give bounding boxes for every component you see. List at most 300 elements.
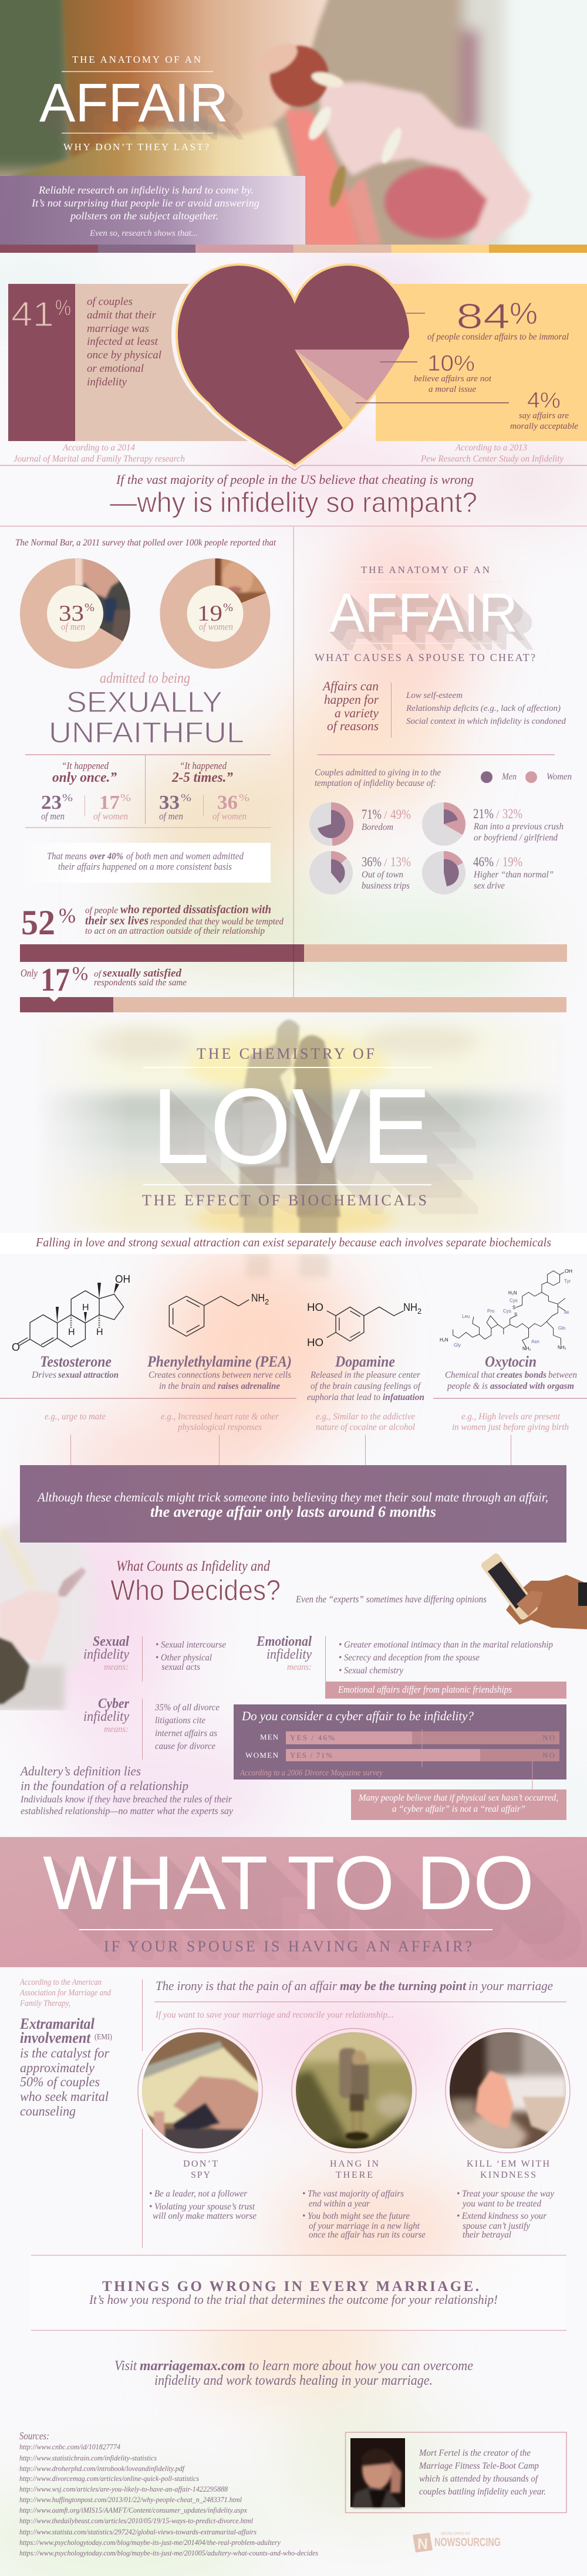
testosterone text: Testosterone xyxy=(40,1353,112,1370)
pie: previous crush: Ran into a previous crush xyxy=(473,822,564,832)
emotional infidelity definition: • Sexual chemistry xyxy=(339,1666,404,1676)
text block: adultery definition: established relationship—no matter what the experts say xyxy=(21,1805,234,1816)
sources list: http://www.statisticbrain.com/infidelity-statistics xyxy=(19,2453,157,2462)
molecule: phenylethylamine: 2 xyxy=(265,1297,269,1306)
temptation intro and legend: Women xyxy=(546,772,572,782)
biochemical names and descriptions: in the brain and xyxy=(159,1381,216,1391)
side note: extramarital involvement: Association for Marriage and xyxy=(19,1988,111,1998)
panel: cyber affair survey: NO xyxy=(542,1751,555,1760)
advice 1: don't spy: • Be a leader, not a follower xyxy=(149,2189,248,2199)
irony statement: may be the turning point xyxy=(340,1978,467,1993)
statistic: 52 percent dissatisfied: their sex lives xyxy=(85,914,149,927)
donut: 19 percent of women: % xyxy=(223,601,233,614)
advice 2: hang in there: once the affair has run its course xyxy=(309,2230,426,2240)
molecule: oxytocin: Tyr xyxy=(564,1279,571,1284)
hero intro text: pollsters on the subject altogether. xyxy=(69,210,218,222)
reflection below the white band xyxy=(247,1254,329,1277)
PEA text: Phenylethylamine (PEA) xyxy=(147,1353,292,1370)
41 percent figure: 41 xyxy=(11,295,54,334)
table: how often affairs happened: % xyxy=(62,792,73,804)
table: how often affairs happened: of men xyxy=(159,811,183,822)
advice 3: kill 'em with kindness xyxy=(446,2028,570,2240)
sexual infidelity definition: means: xyxy=(104,1662,129,1672)
pie: previous crush: 21% xyxy=(473,806,494,821)
heading: the chemistry of love: THE CHEMISTRY OF xyxy=(197,1045,375,1062)
pie: higher sex drive: Higher “than normal” xyxy=(473,870,554,880)
molecule: oxytocin: S xyxy=(512,1305,515,1310)
reasons block: Affairs can xyxy=(322,679,379,693)
heading: sexually unfaithful: UNFAITHFUL xyxy=(49,716,244,749)
heading: sexually unfaithful: admitted to being xyxy=(100,670,190,686)
callout: over 40 percent xyxy=(25,843,271,883)
kicker: THE ANATOMY OF AN xyxy=(72,54,201,65)
description: of couples xyxy=(87,296,133,308)
cyber infidelity definition: internet affairs as xyxy=(155,1728,217,1738)
label and tips: HANG IN xyxy=(330,2159,379,2169)
author box: Mort Fertel is the creator of the xyxy=(419,2448,531,2458)
question heading: —why is infidelity so rampant? xyxy=(110,487,477,518)
reasons block: a variety xyxy=(335,706,379,720)
molecule: oxytocin: Cys xyxy=(503,1309,511,1314)
temptation intro and legend: Men xyxy=(501,772,517,782)
cyber infidelity definition: means: xyxy=(104,1724,129,1734)
table: how often affairs happened: 36 xyxy=(217,792,238,814)
pie: previous crush: or boyfriend / girlfriend xyxy=(474,833,558,843)
irony statement: The irony is that the pain of an affair xyxy=(156,1978,337,1993)
heading: the chemistry of love xyxy=(142,1045,431,1209)
molecule: oxytocin xyxy=(440,1269,572,1351)
biochemical names and descriptions: between xyxy=(548,1370,577,1380)
developer logo xyxy=(413,2532,501,2553)
table: how often affairs happened: only once.” xyxy=(52,770,117,785)
advice 2: hang in there: THERE xyxy=(336,2170,373,2180)
molecule: phenylethylamine xyxy=(169,1292,269,1336)
temptation intro and legend: Couples admitted to giving in to the xyxy=(315,768,441,778)
statistic: 17 percent satisfied: 17 xyxy=(41,962,70,998)
emotional infidelity definition: infidelity xyxy=(266,1647,312,1662)
closing statement: It’s how you respond to the trial that determines the outcome for your relationship! xyxy=(89,2292,498,2307)
biochemical names and descriptions: Chemical that xyxy=(445,1370,495,1380)
callout: real affair: Many people believe that if physical sex hasn’t occurred, xyxy=(358,1793,558,1803)
author box: which is attended by thousands of xyxy=(419,2474,539,2484)
bar: 52 percent xyxy=(20,944,567,962)
molecule: testosterone: H xyxy=(68,1327,75,1337)
heart pie chart xyxy=(171,263,409,467)
pie: boredom: 49% xyxy=(390,807,411,822)
pie: business trips: business trips xyxy=(362,881,410,891)
pie: business trips: / xyxy=(384,856,387,869)
reasons block: happen for xyxy=(324,692,379,707)
pie: higher sex drive: 19% xyxy=(502,855,522,869)
statistic: 10 percent not moral issue xyxy=(380,351,492,394)
heading: the chemistry of love: THE EFFECT OF BIOCHEMICALS xyxy=(142,1192,427,1209)
sources list xyxy=(19,2430,318,2557)
sources list: http://www.wsj.com/articles/are-you-likely-to-have-an-affair-1422295888 xyxy=(19,2485,228,2493)
colour strip xyxy=(0,245,587,253)
pie: boredom: 71% xyxy=(362,807,382,822)
donut: 19 percent of women: of women xyxy=(199,621,233,632)
statistic: 17 percent satisfied: sexually satisfied xyxy=(102,967,181,979)
sexual infidelity definition xyxy=(83,1634,226,1682)
side note: extramarital involvement: is the catalyst for xyxy=(20,2046,110,2060)
hero title xyxy=(39,54,228,152)
side note: extramarital involvement: involvement xyxy=(20,2029,91,2046)
irony statement xyxy=(154,1978,566,2020)
developer logo: DEVELOPED BY xyxy=(441,2532,471,2536)
panel: 41 percent of couples: marriage was xyxy=(87,323,149,335)
pie: previous crush: / xyxy=(496,808,500,821)
call to action xyxy=(114,2358,473,2388)
irony statement: If you want to save your marriage and reconcile your relationship... xyxy=(155,2010,394,2020)
biochemical names and descriptions xyxy=(31,1353,577,1402)
statistic: 4 percent acceptable xyxy=(356,388,578,431)
advice 2: hang in there: • You both might see the future xyxy=(302,2211,410,2221)
pie: boredom: Boredom xyxy=(362,822,393,832)
panel: 41 percent of couples: infidelity xyxy=(87,376,127,388)
donut: 33 percent of men: of men xyxy=(61,621,85,632)
cyber infidelity definition: cause for divorce xyxy=(155,1741,215,1751)
heading: who decides xyxy=(110,1558,487,1606)
call to action: infidelity and work towards healing in your marriage. xyxy=(154,2373,433,2388)
heading: sexually unfaithful xyxy=(49,670,244,749)
biochemical names and descriptions: Released in the pleasure center xyxy=(310,1370,421,1380)
question heading xyxy=(110,472,477,518)
callout: average affair lasts 6 months: the average affair only lasts around 6 months xyxy=(150,1503,436,1520)
author box xyxy=(345,2432,566,2513)
callout: over 40 percent: over 40% xyxy=(90,850,123,862)
pie: higher sex drive: 46% xyxy=(473,855,494,869)
reasons block: Social context in which infidelity is condoned xyxy=(406,717,566,726)
panel: cyber affair survey: NO xyxy=(542,1733,555,1742)
subhead: WHY DON’T THEY LAST? xyxy=(63,141,209,152)
table: how often affairs happened: % xyxy=(239,792,249,804)
statistic: 17 percent satisfied: of xyxy=(94,970,102,979)
statistic: 17 percent satisfied: % xyxy=(72,963,88,985)
donut: 19 percent of women xyxy=(160,554,270,669)
panel: cyber affair survey xyxy=(234,1704,566,1780)
emotional infidelity definition: means: xyxy=(287,1662,312,1672)
advice 1: don't spy: • Violating your spouse’s trust xyxy=(149,2202,255,2212)
side note: extramarital involvement: (EMI) xyxy=(95,2033,112,2042)
heading: sexually unfaithful: SEXUALLY xyxy=(66,686,222,718)
examples with connectors: e.g., Similar to the addictive xyxy=(316,1412,415,1422)
molecule: oxytocin: Gly xyxy=(454,1343,461,1348)
closing statement: THINGS GO WRONG IN EVERY MARRIAGE. xyxy=(102,2279,479,2294)
heading: the anatomy of an affair: THE ANATOMY OF AN xyxy=(361,564,490,575)
hero photo: woman eating a strawberry xyxy=(0,0,587,264)
molecule: testosterone: H xyxy=(82,1303,89,1313)
emotional infidelity definition: Emotional xyxy=(256,1634,312,1649)
white band statement: Falling in love and strong sexual attraction can exist separately because each involves separate biochemicals xyxy=(35,1235,551,1249)
photo circle: typing on keyboard xyxy=(138,2028,262,2153)
label and tips: KILL ‘EM WITH xyxy=(467,2159,549,2169)
sources list: http://www.thedailybeast.com/articles/2010/05/19/15-ways-to-predict-divorce.html xyxy=(19,2516,253,2525)
examples with connectors: e.g., High levels are present xyxy=(461,1412,561,1422)
biochemical names and descriptions: Creates connections between nerve cells xyxy=(149,1370,291,1380)
panel: 41 percent of couples: % xyxy=(55,296,71,320)
table: how often affairs happened xyxy=(25,754,271,828)
statistic: 84 percent immoral: 84 xyxy=(456,297,510,336)
molecule: oxytocin: Pro xyxy=(487,1309,495,1314)
heading: who decides: What Counts as Infidelity and xyxy=(116,1558,270,1574)
love photo: couple on the beach xyxy=(48,1018,554,1233)
examples with connectors: nature of cocaine or alcohol xyxy=(316,1422,415,1432)
call to action: Visit xyxy=(114,2358,137,2374)
hero intro text: Even so, research shows that... xyxy=(89,229,198,238)
biochemical names and descriptions: associated with orgasm xyxy=(490,1381,574,1391)
pie: business trips xyxy=(309,851,411,894)
statistic: 84 percent immoral: of people consider affairs to be immoral xyxy=(427,332,569,342)
sources list: Sources: xyxy=(19,2430,49,2442)
pie: boredom xyxy=(309,802,411,846)
side note: extramarital involvement: Extramarital xyxy=(19,2015,95,2032)
temptation intro and legend xyxy=(315,768,572,788)
sexual infidelity definition: sexual acts xyxy=(161,1662,200,1672)
biochemical names and descriptions: Drives xyxy=(31,1370,56,1380)
advice 1: don't spy: SPY xyxy=(191,2170,210,2180)
text block: adultery definition: Individuals know if they have breached the rules of their xyxy=(20,1794,232,1805)
sources list: http://www.statista.com/statistics/297242/global-views-towards-extramarital-affairs xyxy=(19,2527,257,2536)
advice 2: hang in there: end within a year xyxy=(309,2199,370,2209)
molecule: oxytocin: Cys xyxy=(510,1298,518,1303)
irony statement: in your marriage xyxy=(468,1978,553,1993)
side note: extramarital involvement xyxy=(19,1978,112,2119)
side note: extramarital involvement: counseling xyxy=(20,2104,76,2119)
sources list: http://www.cnbc.com/id/101827774 xyxy=(19,2442,120,2451)
heading: the anatomy of an affair: AFFAIR xyxy=(329,582,518,643)
emotional infidelity definition: Emotional affairs differ from platonic friendships xyxy=(338,1684,512,1695)
panel: 41 percent of couples: admit that their xyxy=(87,309,157,321)
pie: business trips: 36% xyxy=(362,855,382,869)
statistic: 52 percent dissatisfied: to act on an attraction outside of their relationship xyxy=(85,926,265,936)
statistic: 52 percent dissatisfied: responded that they would be tempted xyxy=(150,917,284,927)
cyber infidelity definition xyxy=(83,1696,220,1760)
donut: 33 percent of men: % xyxy=(85,601,95,614)
panel: cyber affair survey: WOMEN xyxy=(245,1751,279,1760)
label and tips: DON’T xyxy=(183,2159,218,2169)
heading: the chemistry of love: LOVE xyxy=(151,1066,431,1186)
biochemical names and descriptions: euphoria that lead to xyxy=(307,1392,380,1402)
source notes under panels: Journal of Marital and Family Therapy research xyxy=(14,454,185,464)
panel: 41 percent of couples xyxy=(8,284,269,441)
sources list: http://www.divorcemag.com/articles/online-quick-poll-statistics xyxy=(19,2474,199,2483)
bar: 17 percent xyxy=(20,993,566,1012)
molecule: dopamine: NH xyxy=(403,1301,417,1313)
emotional infidelity definition xyxy=(256,1634,566,1699)
advice 3: kill 'em with kindness: • Treat your spouse the way xyxy=(457,2189,555,2199)
side note: extramarital involvement: 50% of couples xyxy=(20,2075,100,2089)
text block: adultery definition xyxy=(19,1764,234,1816)
statistic: 4 percent acceptable: 4% xyxy=(527,388,561,413)
table: how often affairs happened: 23 xyxy=(41,792,62,814)
man silhouette xyxy=(239,1020,299,1217)
molecule: oxytocin: Ile xyxy=(564,1310,569,1315)
biochemical names and descriptions: infatuation xyxy=(383,1392,424,1402)
pie: higher sex drive: sex drive xyxy=(474,881,505,891)
heading: who decides: Even the “experts” sometimes have differing opinions xyxy=(295,1594,487,1605)
author box: couples battling infidelity each year. xyxy=(419,2487,546,2497)
reasons block xyxy=(322,679,566,738)
molecule: testosterone: H xyxy=(96,1327,103,1337)
pie: previous crush: 32% xyxy=(502,806,522,821)
reflections xyxy=(244,1217,273,1235)
pie: previous crush xyxy=(422,802,564,846)
panel: 41 percent of couples: or emotional xyxy=(87,362,144,375)
AFFAIR headline with long shadow: AFFAIR xyxy=(39,72,228,133)
subhead: IF YOUR SPOUSE IS HAVING AN AFFAIR? xyxy=(104,1938,472,1955)
callout: over 40 percent: their affairs happened on a more consistent basis xyxy=(58,861,232,872)
woman silhouette xyxy=(294,1035,340,1217)
table: how often affairs happened: of women xyxy=(93,811,128,822)
molecule: oxytocin: OH xyxy=(565,1269,572,1274)
side note: extramarital involvement: According to the American xyxy=(19,1978,102,1987)
statistic: 52 percent dissatisfied: 52 xyxy=(21,903,55,942)
molecule: oxytocin: NH₂ xyxy=(522,1346,531,1351)
statistic: 84 percent immoral xyxy=(406,297,569,342)
biochemical names and descriptions: people & is xyxy=(447,1381,488,1391)
icon: hand holding phone xyxy=(480,1552,587,1629)
table: how often affairs happened: 33 xyxy=(159,792,180,814)
sources list: http://www.aamft.org/iMIS15/AAMFT/Content/consumer_updates/infidelity.aspx xyxy=(19,2506,247,2514)
molecule: dopamine: HO xyxy=(307,1337,323,1348)
statistic: 84 percent immoral: % xyxy=(510,297,538,331)
callout: platonic friendships xyxy=(325,1682,566,1699)
molecule: oxytocin: Gln xyxy=(558,1326,565,1331)
callout: real affair xyxy=(351,1789,566,1820)
statistic: 10 percent not moral issue: believe affairs are not xyxy=(414,374,492,384)
cyber infidelity definition: litigations cite xyxy=(155,1716,205,1726)
examples with connectors xyxy=(45,1412,569,1465)
sources list: https://www.psychologytoday.com/blog/maybe-its-just-me/201005/adultery-what-counts-and-who-decides xyxy=(19,2548,318,2557)
author box: Marriage Fitness Tele-Boot Camp xyxy=(419,2461,539,2471)
panel: cyber affair survey: Do you consider a cyber affair to be infidelity? xyxy=(241,1709,474,1723)
white band statement xyxy=(0,1233,587,1254)
oxytocin text: Oxytocin xyxy=(485,1353,537,1370)
table: how often affairs happened: of men xyxy=(41,811,65,822)
source notes under panels: Pew Research Center Study on Infidelity xyxy=(420,454,564,464)
biochemical names and descriptions: sexual attraction xyxy=(58,1370,119,1380)
call to action: marriagemax.com xyxy=(140,2358,245,2374)
sexual infidelity definition: • Other physical xyxy=(156,1653,212,1663)
panel: cyber affair survey: According to a 2006 Divorce Magazine survey xyxy=(239,1768,383,1778)
phone photo left xyxy=(0,1519,100,1710)
advice 1: don't spy: will only make matters worse xyxy=(153,2211,257,2221)
text block: adultery definition: in the foundation of a relationship xyxy=(21,1778,188,1793)
reasons block: of reasons xyxy=(327,718,379,733)
advice 3: kill 'em with kindness: KINDNESS xyxy=(480,2170,536,2180)
panel: cyber affair survey: MEN xyxy=(260,1733,279,1741)
panel: cyber affair survey: YES / 71% xyxy=(290,1751,332,1760)
molecule: testosterone: OH xyxy=(115,1273,130,1285)
emotional infidelity definition: • Greater emotional intimacy than in the marital relationship xyxy=(339,1640,553,1650)
author portrait xyxy=(350,2438,405,2507)
heading: the anatomy of an affair xyxy=(315,564,535,663)
source notes under panels: According to a 2014 xyxy=(62,443,135,453)
text block: adultery definition: Adultery’s definition lies xyxy=(19,1764,141,1778)
statistic: 17 percent satisfied xyxy=(21,962,187,998)
sexual infidelity definition: • Sexual intercourse xyxy=(156,1640,226,1650)
temptation intro and legend: temptation of infidelity because of: xyxy=(315,778,436,788)
callout: average affair lasts 6 months xyxy=(20,1465,566,1543)
statistic: 52 percent dissatisfied: of people xyxy=(85,906,118,916)
cyber infidelity definition: infidelity xyxy=(83,1709,129,1724)
biochemical names and descriptions: raises adrenaline xyxy=(218,1381,280,1391)
reasons block: Low self-esteem xyxy=(406,691,463,700)
call to action: to learn more about how you can overcome xyxy=(249,2358,473,2374)
advice 3: kill 'em with kindness: you want to be treated xyxy=(461,2199,542,2209)
examples with connectors: e.g., Increased heart rate & other xyxy=(161,1412,279,1422)
molecule: oxytocin: Leu xyxy=(462,1314,470,1319)
sexual infidelity definition: Sexual xyxy=(93,1634,129,1649)
examples with connectors: physiological responses xyxy=(177,1422,262,1432)
advice 3: kill 'em with kindness: spouse can’t justify xyxy=(463,2221,531,2231)
bar chart: men xyxy=(286,1731,559,1744)
advice 3: kill 'em with kindness: their betrayal xyxy=(463,2230,512,2240)
sources list: https://www.psychologytoday.com/blog/maybe-its-just-me/201404/the-real-problem-adultery xyxy=(19,2538,281,2547)
photo circle: flower and tea xyxy=(446,2028,570,2153)
donut: 19 percent of women: 19 xyxy=(197,601,222,626)
hero intro text: Reliable research on infidelity is hard to come by. xyxy=(38,184,254,196)
advice 1: don't spy xyxy=(138,2028,264,2221)
emotional infidelity definition: • Secrecy and deception from the spouse xyxy=(339,1653,480,1663)
table: how often affairs happened: % xyxy=(181,792,191,804)
molecule: dopamine: HO xyxy=(307,1301,323,1313)
examples with connectors: in women just before giving birth xyxy=(452,1422,569,1432)
developer logo: N xyxy=(417,2535,428,2553)
pie: boredom: / xyxy=(384,809,387,822)
advice 3: kill 'em with kindness: • Extend kindness so your xyxy=(457,2211,547,2221)
table: how often affairs happened: 2-5 times.” xyxy=(171,770,233,785)
panel: morality statistics background xyxy=(376,284,587,441)
statistic: 4 percent acceptable: morally acceptable xyxy=(510,422,578,431)
cyber infidelity definition: Cyber xyxy=(98,1696,130,1711)
heading: who decides: Who Decides? xyxy=(110,1575,281,1606)
callout: real affair: a “cyber affair” is not a “real affair” xyxy=(392,1804,525,1814)
biochemical names and descriptions: creates bonds xyxy=(497,1370,546,1380)
hero intro text xyxy=(31,184,259,238)
table: how often affairs happened: % xyxy=(120,792,131,804)
molecule: oxytocin: Asn xyxy=(531,1339,539,1344)
donut: 33 percent of men xyxy=(20,554,135,669)
statistic: 10 percent not moral issue: a moral issue xyxy=(429,385,476,394)
statistic: 10 percent not moral issue: 10% xyxy=(427,351,475,376)
panel: what to do banner xyxy=(0,1837,587,1967)
photo wedge: woman xyxy=(215,558,266,603)
dopamine text: Dopamine xyxy=(335,1353,395,1370)
molecule: oxytocin: H₂N xyxy=(508,1290,517,1296)
molecule: phenylethylamine: NH xyxy=(251,1292,265,1304)
headline with long shadow: WHAT TO DO xyxy=(43,1840,534,1926)
cyber infidelity definition: 35% of all divorce xyxy=(154,1703,220,1713)
pie: higher sex drive: / xyxy=(496,856,500,869)
donut: 33 percent of men: 33 xyxy=(59,601,84,626)
table: how often affairs happened: 17 xyxy=(99,792,120,814)
panel: cyber affair survey: YES / 46% xyxy=(290,1733,335,1742)
molecule: testosterone: O xyxy=(12,1341,20,1353)
hero intro text: It’s not surprising that people lie or avoid answering xyxy=(31,197,259,209)
source notes under panels xyxy=(14,443,564,464)
side note: extramarital involvement: who seek marital xyxy=(20,2089,109,2104)
molecule: dopamine xyxy=(307,1301,421,1348)
statistic: 52 percent dissatisfied: who reported dissatisfaction with xyxy=(120,903,271,916)
developer logo: NOWSOURCING xyxy=(434,2536,501,2549)
statistic: 4 percent acceptable: say affairs are xyxy=(519,411,569,421)
table: how often affairs happened: of women xyxy=(212,811,247,822)
advice 2: hang in there: • The vast majority of affairs xyxy=(302,2189,404,2199)
sources list: http://www.huffingtonpost.com/2013/01/22/why-people-cheat_n_2483371.html xyxy=(19,2495,242,2504)
statistic: 17 percent satisfied: respondents said the same xyxy=(94,978,187,988)
2-5 times column: “It happened xyxy=(180,760,227,771)
